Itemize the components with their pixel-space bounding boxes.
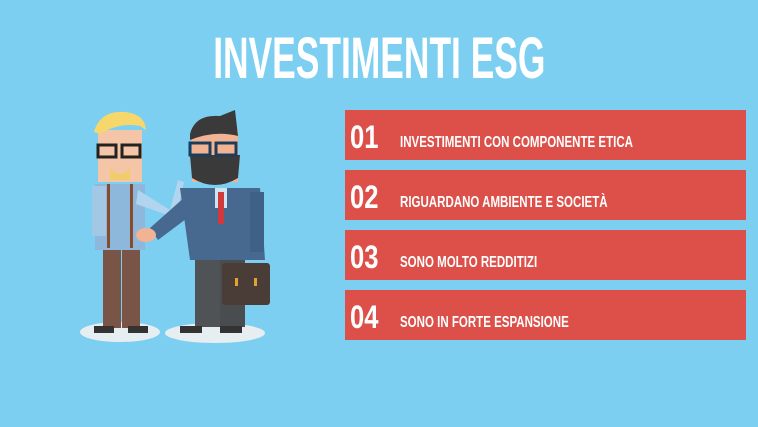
figure: blond man xyxy=(92,112,184,333)
illustration: two businessmen shaking hands xyxy=(80,110,270,343)
item 04: 04 xyxy=(350,299,378,335)
item 02: 02 xyxy=(350,179,378,215)
item 01: 01 xyxy=(350,119,378,155)
item 01: INVESTIMENTI CON COMPONENTE ETICA xyxy=(400,134,633,151)
figure: bearded man xyxy=(136,110,270,333)
item 02 xyxy=(345,170,746,220)
item 02: RIGUARDANO AMBIENTE E SOCIETÀ xyxy=(400,194,608,211)
item 03 xyxy=(345,230,746,280)
item 01 xyxy=(345,110,746,160)
title: INVESTIMENTI ESG xyxy=(213,26,545,91)
shadows xyxy=(80,322,160,342)
item 04 xyxy=(345,290,746,340)
item 04: SONO IN FORTE ESPANSIONE xyxy=(400,314,569,331)
item 03: 03 xyxy=(350,239,378,275)
item 03: SONO MOLTO REDDITIZI xyxy=(400,254,537,271)
